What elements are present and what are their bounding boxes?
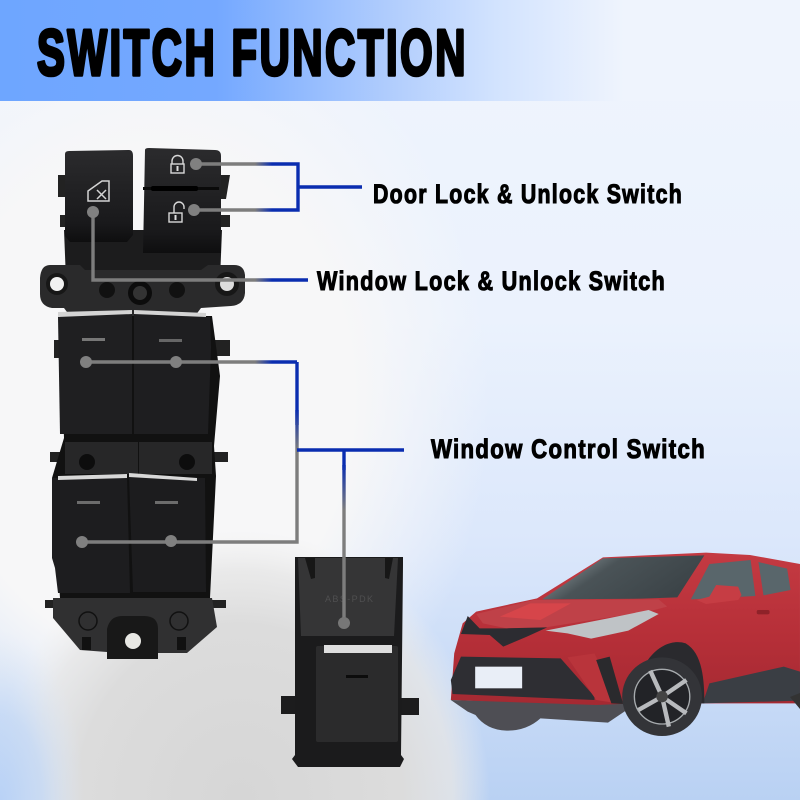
icon: window lock: [88, 181, 109, 201]
title: SWITCH FUNCTION: [37, 16, 468, 89]
rear wheel edge: [790, 693, 800, 709]
upper housing: [64, 230, 222, 280]
car body: [451, 553, 800, 707]
wheel: [622, 657, 702, 736]
bottom plate: [53, 598, 217, 659]
front nose: [461, 616, 547, 647]
upper window buttons: [58, 314, 132, 434]
mid housing: [52, 316, 220, 598]
title banner: [0, 0, 800, 101]
window lock button: [65, 150, 133, 242]
connector: door lock: [188, 158, 362, 216]
door handle: [757, 610, 770, 614]
icon: unlocked padlock: [169, 202, 184, 222]
hood: [476, 599, 667, 628]
main window switch assembly: [40, 148, 245, 659]
label: window lock: Window Lock & Unlock Switch: [317, 266, 666, 296]
mirror: [697, 585, 742, 604]
embossed marking: ABS-PDK: [325, 594, 373, 604]
button: [316, 646, 398, 742]
side clips: [45, 175, 230, 608]
connector: window lock: [87, 206, 308, 280]
bumper side: [567, 653, 618, 703]
wheel arch: [635, 642, 704, 703]
label: window control: Window Control Switch: [431, 434, 706, 464]
icon: locked padlock: [171, 156, 184, 173]
side windows: [691, 560, 791, 599]
grille: [451, 657, 594, 700]
headlight: [545, 610, 659, 639]
lower bumper: [451, 700, 637, 731]
licence plate: [475, 667, 522, 688]
small window switch: [281, 557, 419, 767]
label: door lock: Door Lock & Unlock Switch: [373, 179, 683, 209]
sill: [703, 667, 800, 703]
car: [451, 553, 800, 736]
lower window buttons: [52, 476, 130, 593]
connector: window control: [76, 356, 404, 629]
mounting flange: [40, 265, 245, 316]
door lock button: [143, 148, 221, 253]
windshield: [542, 555, 704, 599]
